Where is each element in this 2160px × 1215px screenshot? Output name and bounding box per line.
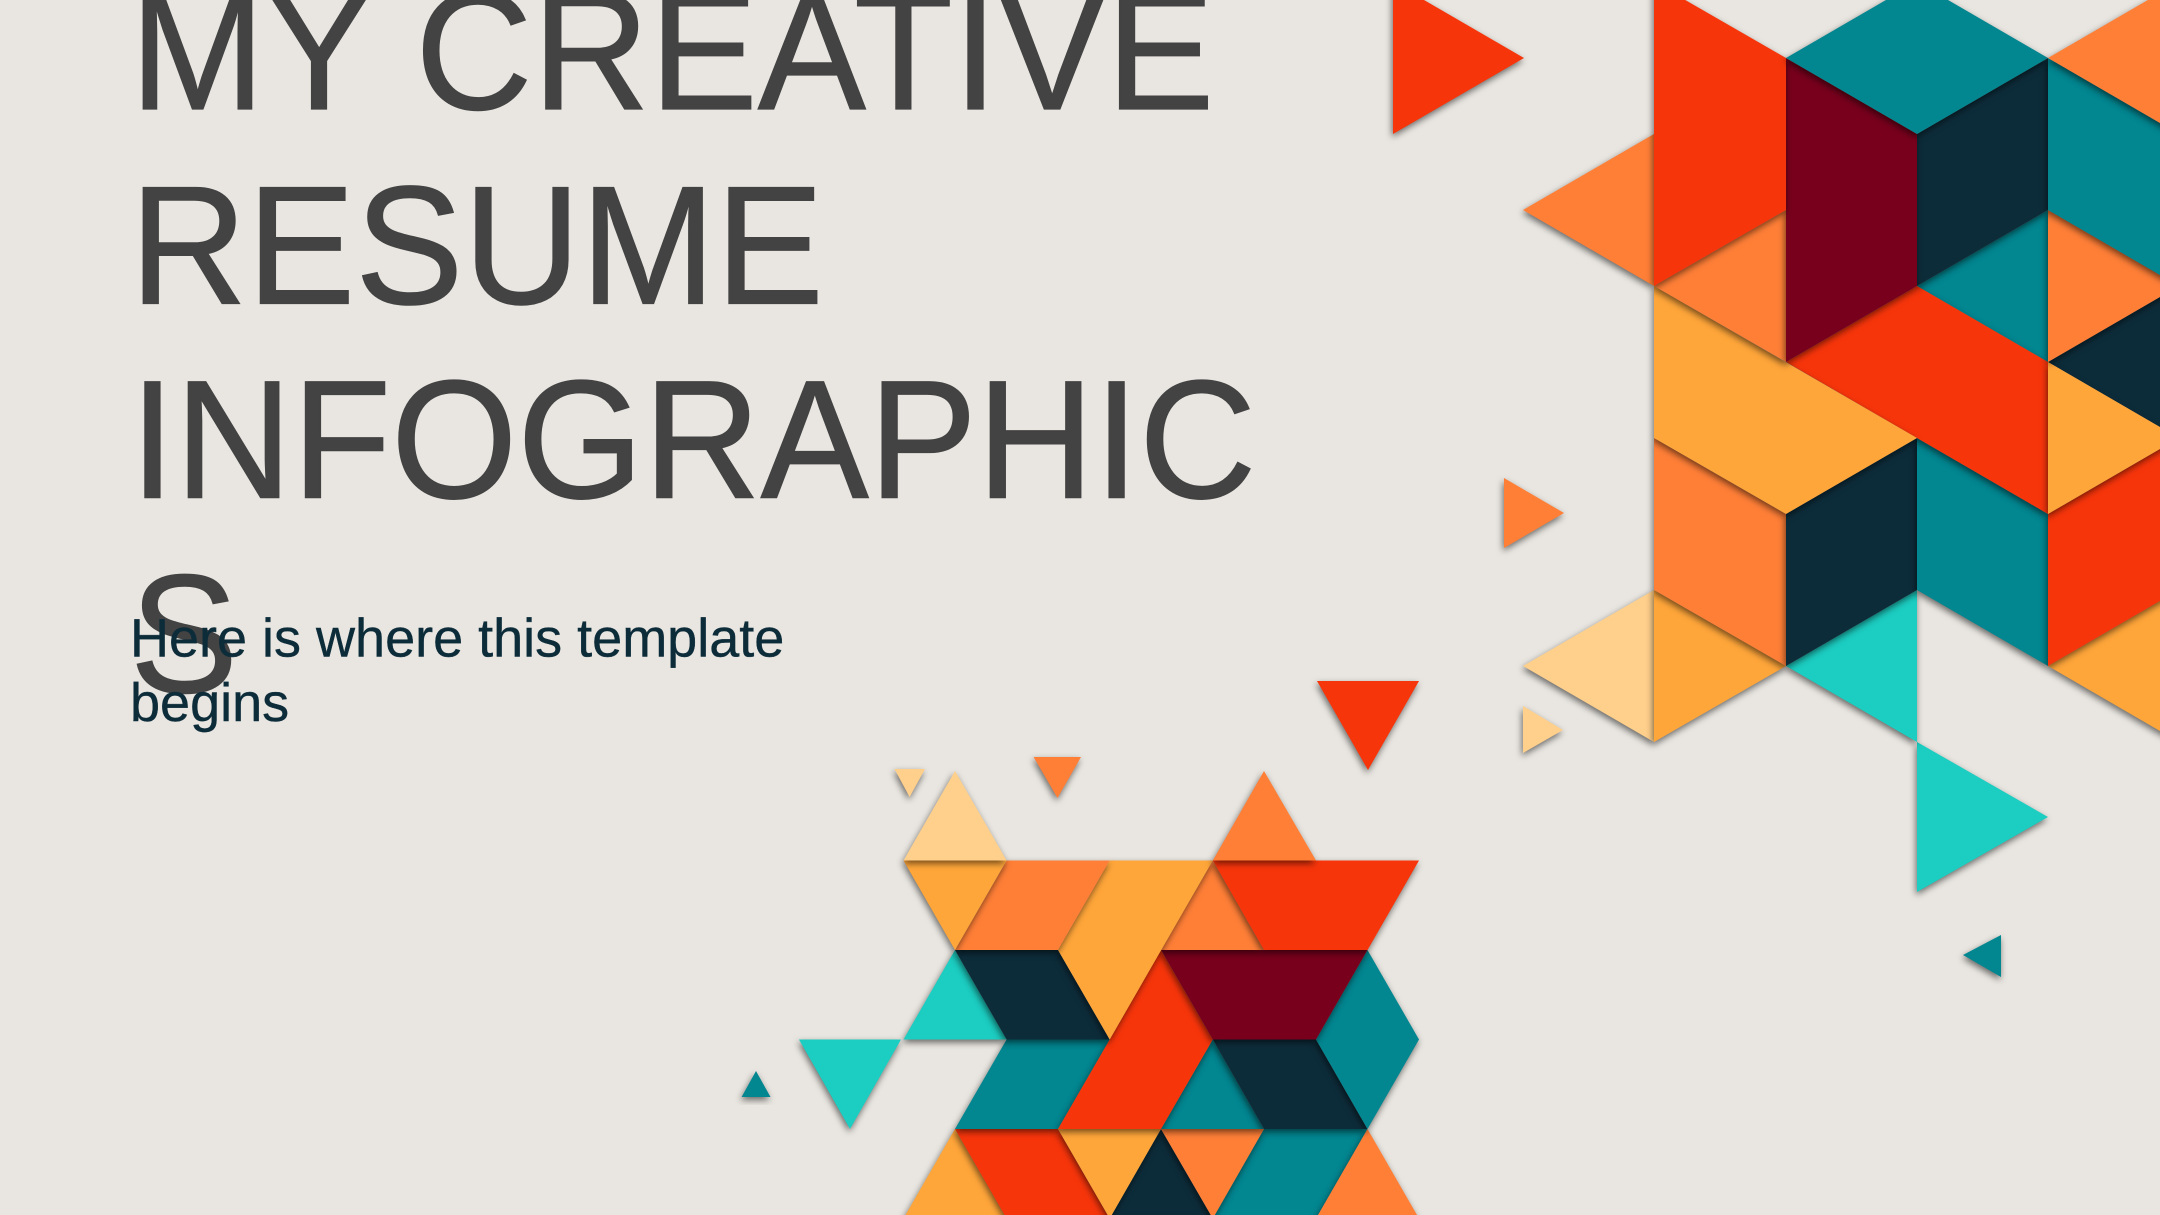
- triangle: orange top: [1213, 771, 1316, 860]
- panel: teal: [1917, 438, 2048, 666]
- title: S: [130, 539, 238, 728]
- panel: navy upper: [1917, 58, 2048, 286]
- panel: navy lower: [1213, 1040, 1368, 1129]
- geometric cluster: bottom center: [904, 771, 1419, 1215]
- triangle: orange down: [1161, 1129, 1264, 1215]
- triangle: turquoise: [904, 950, 1007, 1040]
- panel: red bottom: [955, 1129, 1110, 1215]
- panel: red right: [2048, 438, 2160, 666]
- floating triangles: right: [1393, 0, 2001, 977]
- triangle: teal small: [742, 1071, 770, 1097]
- subtitle: Here is where this template: [130, 608, 784, 668]
- triangle: orange inner: [1161, 860, 1264, 950]
- triangle: red: [1393, 0, 1524, 134]
- triangle: yellow right: [2048, 362, 2160, 514]
- panel: red trapezoid: [1213, 860, 1419, 950]
- panel: navy: [1786, 438, 1917, 666]
- panel: maroon: [1161, 950, 1368, 1040]
- panel: navy right triangle: [2048, 286, 2160, 438]
- triangle: orange right: [2048, 210, 2160, 362]
- panel: navy upper: [955, 950, 1110, 1040]
- triangle: yellow far right: [2048, 590, 2160, 742]
- triangle: orange top right: [2048, 0, 2160, 134]
- triangle: light yellow: [904, 771, 1007, 860]
- panel: teal triangle: [1917, 210, 2048, 362]
- title: RESUME: [130, 150, 824, 340]
- panel: orange parallelogram: [955, 860, 1110, 950]
- triangle: turquoise down: [799, 1040, 901, 1129]
- triangle: light yellow small: [1523, 706, 1563, 753]
- floating triangles: bottom: [742, 681, 1419, 1129]
- geometric cluster: top right: [1523, 0, 2160, 892]
- triangle: yellow down: [1058, 1129, 1161, 1215]
- triangle: navy bottom: [1110, 1129, 1213, 1215]
- triangle: teal small: [1963, 935, 2001, 977]
- triangle: turquoise: [1786, 590, 1917, 742]
- title: INFOGRAPHIC: [130, 345, 1256, 534]
- panel: teal right: [1316, 950, 1419, 1129]
- triangle: orange small: [1034, 757, 1081, 798]
- title: [130, 0, 1256, 728]
- triangle: orange inner: [1654, 210, 1786, 362]
- panel: teal right: [2048, 58, 2160, 286]
- panel: red center: [1058, 950, 1213, 1129]
- panel: red center: [1786, 286, 2048, 514]
- triangle: orange bottom right: [1316, 1129, 1419, 1215]
- panel: yellow parallelogram: [1654, 286, 1917, 514]
- triangle: yellow: [1654, 590, 1786, 742]
- panel: orange: [1654, 438, 1786, 666]
- panel: yellow parallelogram: [1058, 860, 1213, 1040]
- subtitle: [130, 608, 784, 733]
- triangle: teal: [1161, 1040, 1264, 1129]
- panel: maroon: [1786, 58, 1917, 362]
- triangle: light yellow small: [894, 769, 925, 797]
- triangle: yellow bottom: [904, 1129, 1007, 1215]
- panel: teal bottom: [1213, 1129, 1368, 1215]
- triangle: light yellow left: [1523, 590, 1654, 742]
- triangle: orange small: [1504, 478, 1564, 548]
- triangle: orange left: [1523, 134, 1654, 286]
- triangle: red down: [1317, 681, 1419, 770]
- subtitle: begins: [130, 673, 289, 733]
- triangle: yellow: [904, 860, 1007, 950]
- triangle: turquoise large: [1917, 742, 2048, 892]
- panel: teal left: [955, 1040, 1110, 1129]
- panel: teal rhombus: [1786, 0, 2048, 134]
- panel: red upper: [1654, 0, 1786, 286]
